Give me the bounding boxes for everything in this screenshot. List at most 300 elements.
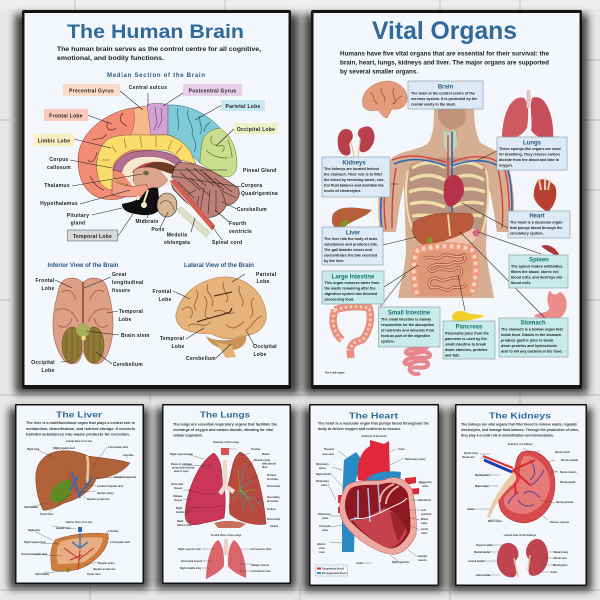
intro text: The liver is a multifunctional organ that plays a central role in	[26, 421, 135, 425]
callout: stomach: acid to kill any bacteria in the food.	[501, 350, 562, 354]
central illustration: human torso	[378, 108, 514, 298]
diagram: inferior liver: Right lobe	[28, 529, 41, 532]
labels: Left	[421, 509, 426, 512]
labels: Pulmonary	[316, 480, 330, 483]
callout: liver: The liver rids the body of toxic	[324, 237, 377, 241]
icon: stomach	[534, 291, 566, 319]
diagram: lungs anatomy	[170, 448, 281, 528]
diagram: kidneys lateral view: Lateral border	[468, 560, 485, 563]
diagram: lungs anatomy: fluid	[262, 466, 268, 469]
callout: kidneys	[322, 157, 390, 197]
heading: The Human Brain: The Human Brain	[67, 22, 244, 43]
subheading: lateral view: Lateral View of the Brain	[184, 263, 254, 269]
diagram: lungs anatomy: fissure	[174, 499, 183, 502]
diagram: lungs anatomy: keep it open	[174, 470, 189, 473]
callout: kidneys: The kidneys are located behind	[324, 167, 380, 171]
midbrain	[122, 187, 160, 215]
diagram: lateral liver: Right lobe	[27, 448, 40, 451]
subheading: inferior view of a liver: Inferior View of a Liver	[66, 521, 92, 524]
callout: spleen: filters the blood, stores red	[511, 270, 559, 274]
labels: median section: Parietal Lobe	[225, 104, 261, 110]
diagram: lungs anatomy: with pleural	[262, 462, 276, 466]
intro text	[173, 422, 277, 438]
intro text	[461, 422, 579, 438]
labels: Superior	[324, 448, 334, 451]
diagram: kidney anatomy: Renal vein	[462, 456, 475, 459]
diagram: inferior liver: Common hepatic duct	[21, 553, 47, 556]
legend: blood types: Oxygenated blood	[322, 568, 344, 570]
leader lines	[380, 151, 545, 318]
callout: pancreas: pancreas is used by the	[445, 337, 487, 341]
diagram: kidney anatomy	[462, 448, 579, 524]
diagram: inferior liver: Gall bladder	[35, 573, 49, 576]
small intestine	[424, 255, 466, 290]
diagram: kidney anatomy: Renal artery	[464, 452, 479, 455]
callout: large intestine: This organ removes water from	[324, 281, 380, 285]
thalamus	[133, 167, 168, 190]
heading: The Heart: The Heart	[349, 410, 398, 420]
diagram: lateral liver: Left hepatic duct	[108, 446, 128, 449]
intro text: exchange of oxygen and carbon dioxide, allowing for vital	[173, 428, 273, 432]
heading: Vital Organs: Vital Organs	[372, 17, 517, 45]
icon: brain	[363, 81, 407, 118]
icon: liver	[332, 207, 372, 231]
diagram: kidney anatomy: Fibrous capsule	[550, 521, 570, 524]
diagram: lateral liver: Falciform ligament	[114, 476, 136, 479]
labels: Right ventricle	[392, 561, 410, 564]
labels: lateral view: Frontal	[153, 289, 172, 295]
labels: lateral view: Lobe	[256, 279, 270, 285]
callout: kidneys: the stomach. Their role is to filter	[324, 172, 383, 176]
diagram: inferior liver: Cystic duct	[87, 573, 101, 576]
labels: median section: Medulla	[167, 232, 187, 238]
labels: Pulmonary	[316, 463, 330, 466]
callout: stomach: produce gastric juice to break	[501, 338, 554, 342]
callout: spleen: The spleen makes antibodies,	[511, 264, 563, 268]
diagram: inferior liver: Left hepatic duct	[110, 541, 130, 544]
labels: median section: Limbic Lobe	[38, 138, 70, 144]
labels: veins	[422, 485, 429, 488]
brainstem and spinal cord	[160, 170, 216, 232]
diagram: kidney anatomy: Minor calyx	[488, 520, 502, 523]
labels: Pulmonary	[419, 481, 433, 484]
labels: inferior view: Great	[112, 272, 127, 278]
diagram: kidneys lateral view: Medial border	[474, 551, 490, 554]
diagram: lungs anatomy: Oblique	[173, 495, 183, 498]
callout: liver: Liver	[346, 230, 361, 236]
labels: median section: Pineal Gland	[243, 168, 277, 174]
subheading: lateral view of the kidneys: Lateral View of the Kidneys	[504, 534, 537, 537]
intro text	[26, 421, 135, 436]
poster: Vital Organs	[311, 10, 582, 389]
labels: Aorta	[356, 562, 363, 565]
icon: heart	[534, 178, 556, 212]
labels: muscle	[418, 559, 427, 562]
diagram: lungs anatomy: inferior lobe	[177, 524, 192, 527]
pulmonary artery	[364, 471, 401, 492]
labels: veins	[321, 484, 328, 487]
diagram: lungs frontal view: Right superior lobe	[178, 548, 202, 551]
callout: liver: concentrates the bile secreted	[324, 254, 378, 258]
vena cava	[342, 452, 362, 552]
precentral gyrus	[130, 106, 153, 136]
labels: inferior view: longitudinal	[112, 280, 144, 286]
intro text: harmful substances into waste products for excretion.	[26, 432, 130, 436]
legend: blood types	[316, 565, 348, 576]
diagram: lungs anatomy: Bronchiole	[267, 518, 281, 521]
callout: small intestine: The small intestine is mainly	[381, 318, 432, 322]
subheading: anatomy of the lungs: Anatomy of the Lungs	[213, 441, 240, 444]
diagram: lungs frontal view: Horizontal fissure	[181, 560, 203, 563]
corpus callosum	[113, 151, 183, 172]
large intestine	[414, 246, 476, 294]
labels: median section: Central sulcus	[129, 85, 167, 91]
callout: spleen: blood cells, and destroys old	[511, 276, 563, 280]
poster: The Liver	[15, 404, 144, 584]
labels: median section: Fourth	[229, 221, 247, 227]
labels: Aorta	[398, 448, 405, 451]
diagram: kidneys lateral view: Inferior pole	[476, 574, 491, 577]
labels: inferior view: Lobe	[118, 317, 132, 323]
diagram: kidneys lateral view: Renal artery	[554, 551, 569, 554]
limbic lobe	[97, 135, 196, 190]
labels: Tricuspid	[319, 525, 331, 528]
diagram: lungs anatomy: Bronchiole	[267, 485, 281, 488]
callout: large intestine	[322, 271, 384, 304]
callout: heart: Heart	[529, 214, 545, 220]
diagram: kidney anatomy: Renal papilla	[560, 481, 576, 484]
poster: The Human Brain	[22, 10, 291, 389]
callout: stomach: The stomach is a hollow organ that	[501, 328, 563, 332]
labels: inferior view: Frontal	[36, 278, 55, 284]
labels: cava	[319, 551, 325, 554]
heart body	[340, 478, 416, 554]
poster: The Kidneys	[455, 404, 587, 586]
labels: Cardiac	[418, 555, 428, 558]
callout: liver: The gall bladder stores and	[324, 248, 373, 252]
diagram: lateral view of the brain	[173, 274, 266, 358]
diagram: lateral liver: Right hepatic duct	[53, 447, 75, 450]
intro text	[340, 50, 549, 76]
frontal lobe	[78, 107, 150, 200]
labels: valve	[421, 522, 428, 525]
callout: large intestine: processing food.	[324, 298, 354, 302]
labels: Aortic	[421, 528, 429, 531]
callout: brain: The brain is the control centre of the	[411, 92, 475, 96]
diagram: lungs anatomy: Primary	[267, 474, 277, 477]
callout: spleen	[509, 255, 568, 288]
labels: Inferior	[317, 543, 326, 546]
labels: median section: oblongata	[164, 240, 190, 246]
labels: Mitral	[421, 518, 428, 521]
labels: inferior view: Lobe	[41, 286, 55, 292]
labels: lateral view: Occipital	[253, 344, 277, 350]
diagram: kidney anatomy: Renal pelvis	[475, 474, 490, 477]
callout: stomach: holds food. Glands in the stomach	[501, 333, 562, 337]
callout: brain: Brain	[438, 84, 454, 90]
intro text	[57, 46, 261, 62]
callout: stomach: down proteins and hydrochloric	[501, 344, 557, 348]
intro text: electrolytes, and manage fluid balance. Through the production of urine,	[461, 428, 579, 432]
callout: lungs: dioxide from the blood and take in	[499, 158, 560, 162]
callout: heart: circulatory system.	[510, 232, 544, 236]
intro text: brain, heart, lungs, kidneys and liver. The major organs are supported	[340, 60, 549, 66]
labels: median section: callosum	[47, 165, 71, 171]
diagram: lungs anatomy: Trachea	[251, 448, 261, 451]
subheading: inferior view: Inferior View of the Brain	[48, 263, 119, 269]
intro text: The heart is a muscular organ that pumps blood throughout the	[318, 422, 429, 426]
occipital lobe	[200, 128, 237, 177]
diagram: inferior liver: Hepatic artery	[98, 562, 115, 565]
diagram: inferior liver	[21, 526, 130, 576]
heading: The Kidneys: The Kidneys	[489, 410, 551, 420]
diagram: lungs anatomy: bronchus	[267, 500, 279, 503]
diagram: kidneys lateral view	[468, 539, 569, 577]
inner cream area	[122, 157, 178, 192]
callout: stomach	[499, 318, 568, 357]
diagram: lungs anatomy: bronchus	[267, 478, 279, 481]
diagram: kidney anatomy: Ureter	[467, 508, 474, 511]
diagram: kidney anatomy: Renal medulla	[561, 459, 579, 462]
aorta	[358, 440, 390, 482]
heading: The Liver: The Liver	[56, 410, 103, 420]
labels: Right atrium	[316, 473, 331, 476]
callout: liver: by the liver.	[324, 259, 344, 263]
diagram: lateral liver: Hepatic portal vein	[87, 498, 110, 501]
intro text: emotional, and bodily functions.	[57, 55, 164, 62]
labels: median section: Corpora	[241, 183, 262, 189]
intro text	[318, 422, 429, 431]
diagram: lungs anatomy: fissure	[174, 487, 183, 490]
diagram: kidneys lateral view: Ureter	[550, 571, 557, 574]
belly base	[412, 246, 478, 296]
diagram: lateral liver	[24, 446, 136, 516]
labels: lateral view: Cerebellum	[186, 356, 216, 362]
labels	[316, 448, 433, 565]
subheading: anatomy of a kidney: Anatomy of a Kidney	[508, 443, 533, 446]
diagram: inferior liver: Hepatic vein	[56, 527, 71, 530]
callout: pancreas	[443, 321, 495, 359]
callout: liver: substances and produces bile.	[324, 242, 378, 246]
labels: Pulmonary artery	[405, 458, 426, 461]
diagram: kidney anatomy: Renal cortex	[555, 451, 571, 454]
icon: lungs	[502, 90, 553, 143]
callout: lungs: Lungs	[523, 140, 542, 146]
diagram: kidney anatomy: Renal column	[560, 471, 577, 474]
diagram: lungs frontal view: Oblique fissure	[251, 564, 270, 567]
intro text: they play a crucial role in detoxification and homeostasis.	[461, 434, 554, 438]
labels: inferior view: Temporal	[119, 309, 144, 315]
callout: lungs	[497, 137, 567, 170]
diagram: lungs anatomy: Pleural cavity	[254, 459, 271, 462]
pons	[157, 193, 177, 217]
subheading: median section: Median Section of the Brain	[107, 73, 205, 79]
diagram: heart anatomy	[316, 440, 433, 565]
callout: heart: that pumps blood through the	[510, 226, 562, 230]
callout: lungs: oxygen.	[499, 164, 513, 168]
diagram: lungs anatomy: Alveoli	[270, 525, 279, 528]
diagram: lateral liver: Gall bladder	[24, 506, 38, 509]
subheading: anatomy of the heart: Anatomy of the Heart	[361, 435, 387, 438]
diagram: lungs frontal view	[178, 539, 272, 579]
intro text: cellular respiration.	[173, 434, 203, 438]
heart	[444, 175, 464, 207]
labels: inferior view: Brain stem	[121, 333, 150, 339]
footer note: The 5 vital organs	[325, 372, 345, 374]
intro text: The lungs are essential respiratory organs that facilitate the	[173, 422, 277, 426]
diagram: lungs anatomy: Right	[176, 507, 183, 510]
labels: lateral view: Lobe	[171, 344, 185, 350]
labels: vena cava	[322, 453, 335, 456]
diagram: lungs anatomy: Secondary	[267, 496, 280, 499]
callout: small intestine	[378, 307, 440, 347]
diagram: lungs anatomy: Rings of cartilage	[171, 463, 193, 466]
diagram: lateral liver: Common hepatic duct	[97, 485, 123, 488]
callout: large intestine: the waste remaining after the	[324, 286, 376, 290]
labels: median section: Spinal cord	[212, 240, 242, 246]
subheading: lateral view of a liver: Lateral View of a Liver	[66, 440, 92, 443]
poster: The Heart	[309, 404, 439, 586]
labels: median section: Pons	[151, 227, 165, 233]
callout: brain	[408, 81, 483, 109]
labels: inferior view: Lobe	[41, 368, 55, 374]
diagram: lungs frontal view: Right middle lobe	[180, 567, 202, 570]
icon: large intestine	[333, 307, 370, 358]
diagram: inferior view of the brain	[53, 277, 119, 364]
icon: kidneys	[338, 126, 375, 156]
callout: large intestine: Large Intestine	[332, 274, 375, 280]
diagram: kidney anatomy: Major calyx	[475, 485, 489, 488]
diagram: lungs anatomy: middle lobe	[176, 511, 190, 514]
labels: median section: Quadrigemina	[241, 191, 278, 197]
intro text: body to deliver oxygen and nutrients to tissues.	[318, 427, 401, 431]
diagram: lungs anatomy: Tertiary	[267, 508, 277, 511]
labels: lateral view: Lobe	[253, 352, 267, 358]
diagram: kidney anatomy: Renal pyramid	[556, 501, 574, 504]
callout: pancreas: Pancreas	[456, 324, 483, 330]
throat	[443, 130, 458, 158]
labels: median section: ventricle	[229, 229, 252, 235]
intro text: metabolism, detoxification, and nutrient storage. It converts	[26, 427, 135, 431]
callout: pancreas: small intestine to break	[445, 342, 487, 346]
callout: brain: cranial cavity in the skull.	[411, 102, 456, 106]
callout: lungs: for breathing. They remove carbon	[499, 152, 561, 156]
callout: heart	[508, 211, 570, 238]
intro text: The kidneys are vital organs that filter blood to remove waste, regulate	[461, 422, 577, 426]
diagram: inferior liver: Hepatic portal vein	[93, 568, 116, 571]
callout: small intestine: of nutrients and minerals from	[381, 328, 435, 332]
diagram: inferior liver: Right hepatic duct	[24, 541, 46, 544]
labels: Left atrium	[418, 499, 432, 502]
callout: kidneys: the blood by removing waste, con-	[324, 178, 385, 182]
diagram: median section of the brain	[70, 91, 241, 240]
labels: valve	[322, 529, 329, 532]
labels: median section: Postcentral Gyrus	[189, 88, 236, 94]
diagram: lungs frontal view: Left superior lobe	[250, 548, 272, 551]
labels: median section: Midbrain	[135, 219, 159, 225]
icon: small intestine	[403, 343, 430, 374]
callout: small intestine: Small Intestine	[388, 310, 431, 316]
labels: inferior view: fissure	[112, 288, 130, 294]
labels: lateral view	[153, 272, 277, 362]
labels: median section: Precentral Gyrus	[69, 88, 114, 94]
callout: pancreas: and fats.	[445, 354, 460, 358]
poster: The Lungs	[162, 404, 291, 584]
labels: median section: Occipital Lobe	[237, 127, 275, 133]
subheading: frontal view of the lungs: Frontal View of the Lungs	[211, 534, 242, 537]
labels: inferior view	[31, 272, 150, 374]
diagram: lungs anatomy: Right	[177, 520, 184, 523]
callout: kidneys: levels of electrolytes.	[324, 189, 361, 193]
ribcage and chest	[407, 158, 487, 232]
diagram: lateral liver: Left lobe	[123, 454, 134, 457]
diagram: lateral liver: Hepatic artery	[97, 492, 114, 495]
intro text: The human brain serves as the control centre for all cognitive,	[57, 46, 261, 53]
labels: lateral view: Parietal	[256, 272, 277, 278]
diagram: lungs anatomy: Horizontal	[171, 483, 184, 486]
labels: ventricle	[421, 513, 432, 516]
diagram: lateral liver: Cystic duct	[40, 513, 54, 516]
labels: inferior view: Cerebellum	[113, 362, 143, 368]
labels: median section: Thalamus	[44, 183, 70, 189]
labels: median section: Frontal Lobe	[49, 114, 83, 120]
callout: brain: nervous system. It is protected by the	[411, 97, 477, 101]
parietal lobe	[168, 105, 220, 163]
labels: median section: Pituitary	[67, 213, 89, 219]
major vessels	[381, 132, 512, 230]
callout: kidneys: trol fluid balance and maintain the	[324, 184, 384, 188]
intro text: by several smaller organs.	[340, 68, 418, 76]
diagram: lungs anatomy: Pleura	[262, 453, 270, 456]
labels: median section: Hypothalamus	[40, 201, 78, 207]
labels: artery	[319, 467, 327, 470]
callout: small intestine: responsible for the absorption	[381, 323, 435, 327]
torso skin	[378, 108, 514, 298]
diagram: kidneys lateral view: Renal pelvis	[553, 564, 568, 567]
labels: Pulmonary	[318, 513, 332, 516]
callout: lungs: These sponge-like organs are used	[499, 147, 561, 151]
labels: lateral view: Lobe	[158, 297, 172, 303]
callout: spleen: Spleen	[529, 258, 549, 264]
icon: pancreas	[452, 311, 485, 323]
callout: small intestine: system.	[381, 340, 395, 344]
labels: lateral view: Temporal	[160, 336, 185, 342]
heading: The Lungs: The Lungs	[200, 410, 250, 420]
labels: median section	[34, 84, 278, 246]
labels: median section: gland	[71, 220, 85, 226]
stomach and spleen	[446, 228, 477, 247]
labels: vena	[319, 547, 325, 550]
liver	[412, 213, 473, 245]
intro text: Humans have five vital organs that are essential for their survival: the	[340, 50, 549, 58]
diagram: lungs anatomy: Right superior lobe	[170, 453, 194, 456]
callout: liver	[322, 227, 383, 265]
labels: median section: Corpus	[49, 157, 69, 163]
hypothalamus	[112, 180, 150, 197]
icon: spleen	[541, 245, 560, 258]
callout: stomach: Stomach	[520, 320, 546, 326]
callout: heart: The heart is a muscular organ	[510, 220, 563, 224]
callout: pancreas: Pancreatic juice from the	[445, 332, 489, 336]
callout: spleen: blood cells.	[511, 281, 531, 285]
labels: median section: Cerebellum	[237, 207, 267, 213]
callout: large intestine: digestion system has finished	[324, 292, 378, 296]
labels: inferior view: Occipital	[31, 360, 55, 366]
cerebellum	[172, 163, 239, 217]
leader lines	[70, 91, 241, 240]
diagram: kidneys lateral view: Renal vein	[554, 557, 567, 560]
diagram: lungs anatomy: around the trachea	[172, 466, 195, 470]
